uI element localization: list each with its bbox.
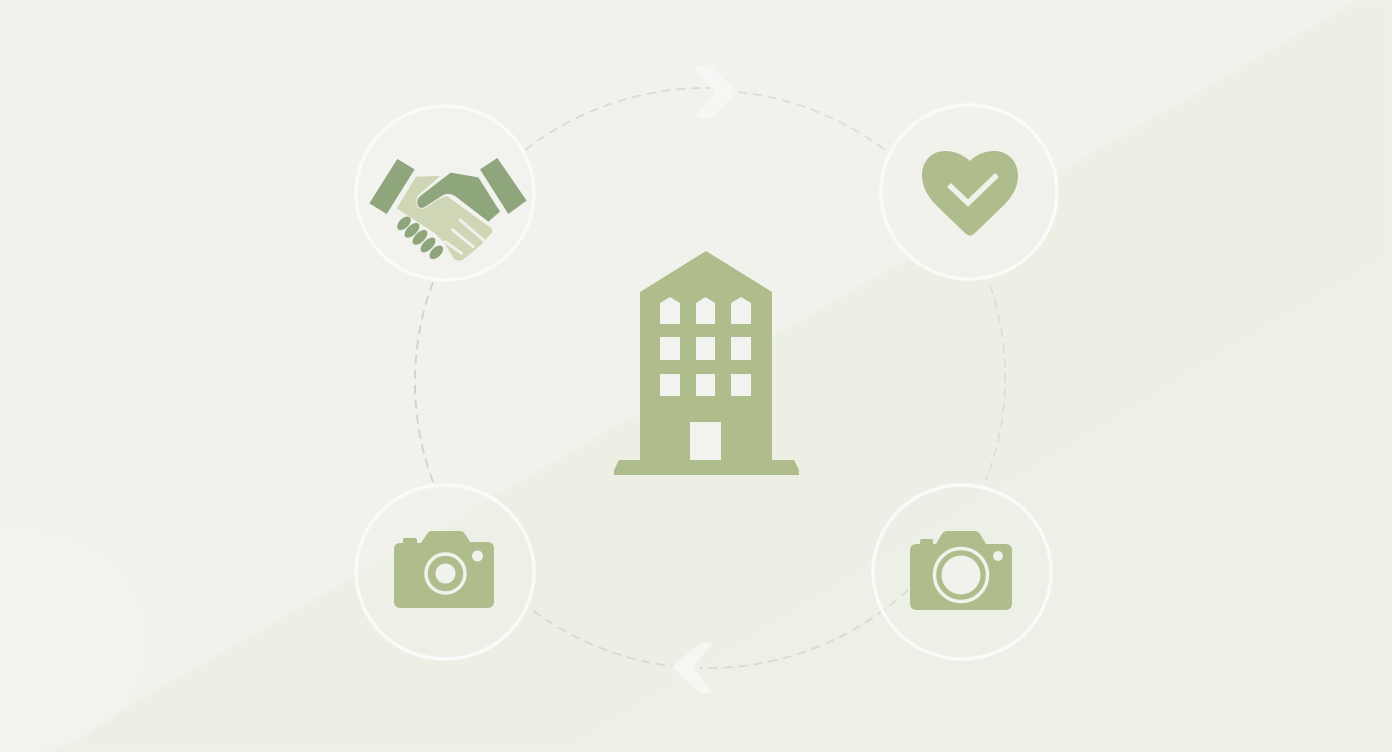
arrow: top chevron bbox=[693, 66, 737, 118]
dashed cycle ring bbox=[415, 88, 1005, 668]
camera lens left bbox=[426, 550, 483, 593]
icon: camera right bbox=[910, 531, 1012, 610]
icon: heart with check bbox=[922, 151, 1018, 236]
center building bbox=[614, 251, 799, 475]
arrow: bottom chevron bbox=[672, 643, 713, 693]
node: handshake bbox=[356, 106, 534, 280]
node ring: camera left bbox=[356, 485, 534, 659]
camera lens right bbox=[934, 548, 1003, 602]
node: heart check bbox=[881, 105, 1057, 279]
icon: check mark bbox=[949, 175, 997, 203]
icon: handshake bbox=[369, 158, 527, 262]
icon: camera left bbox=[394, 531, 494, 608]
node ring: heart bbox=[881, 105, 1057, 279]
node: camera right bbox=[873, 485, 1051, 659]
node ring: handshake bbox=[356, 106, 534, 280]
building door bbox=[690, 422, 721, 460]
node: camera left bbox=[356, 485, 534, 659]
building windows bbox=[660, 297, 751, 396]
node ring: camera right bbox=[873, 485, 1051, 659]
building body bbox=[614, 251, 799, 475]
